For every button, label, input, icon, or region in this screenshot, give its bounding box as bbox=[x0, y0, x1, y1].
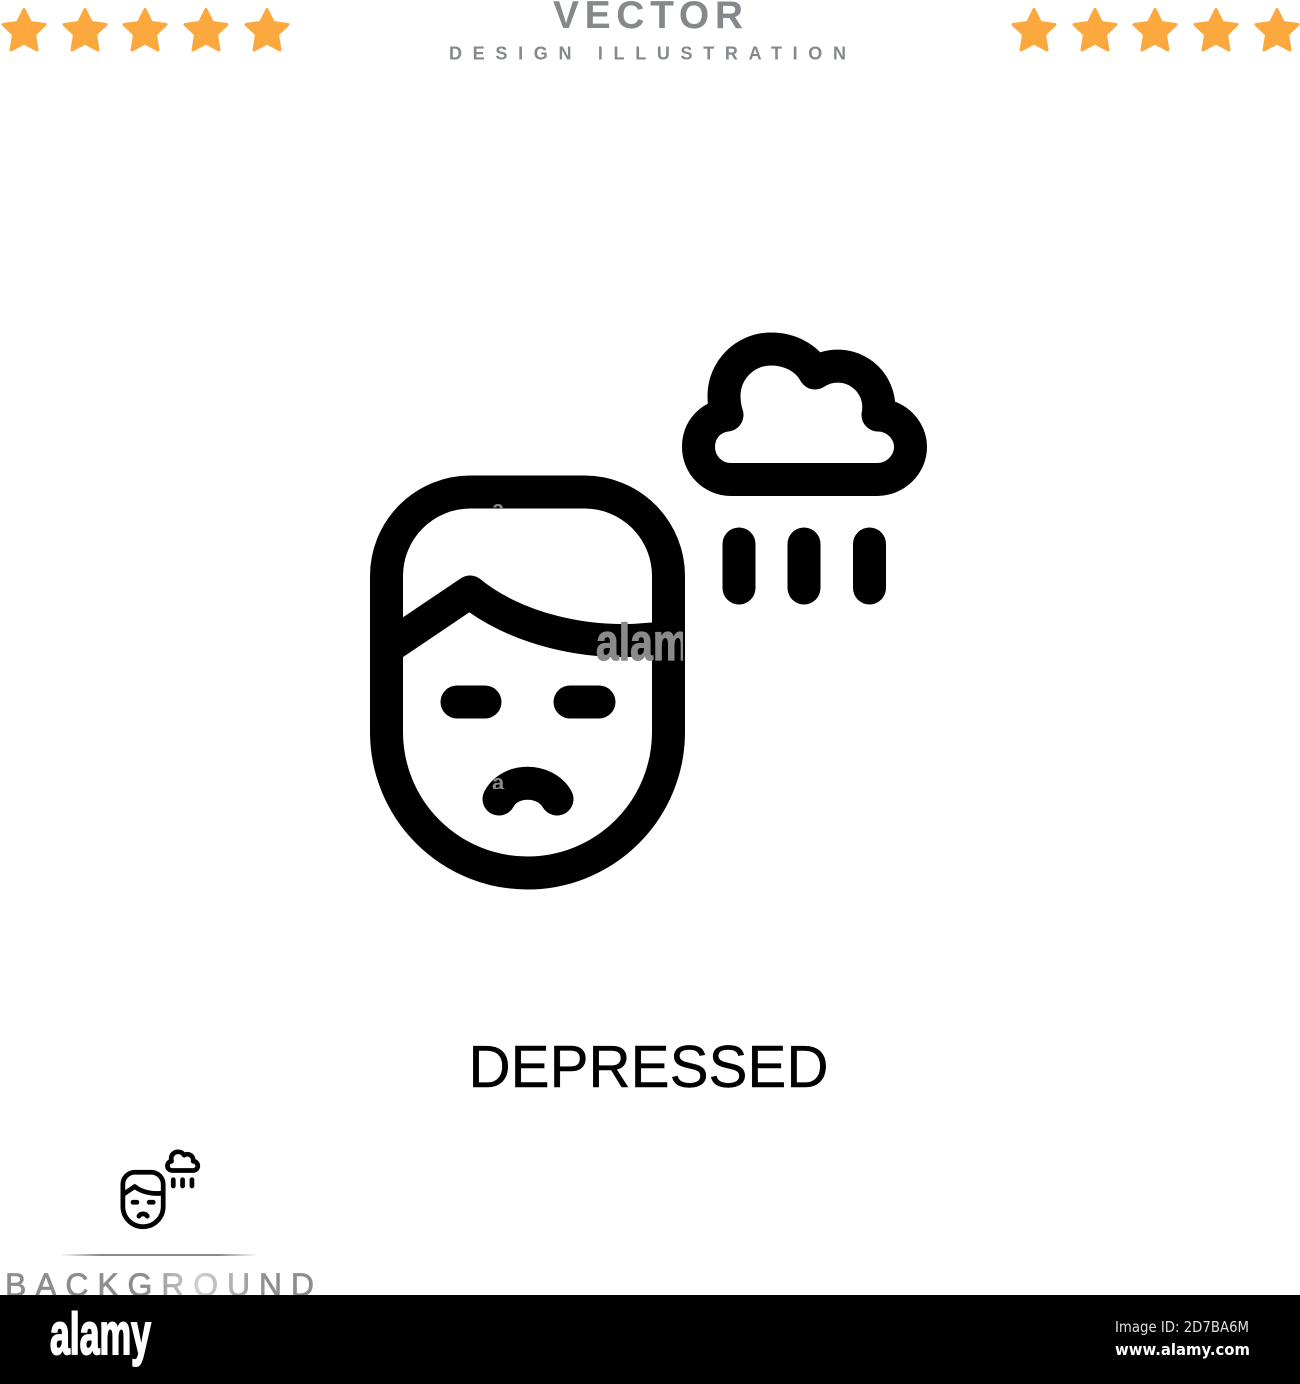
cloud bbox=[698, 349, 910, 480]
image ID: Image ID: 2D7BA6M bbox=[1115, 1318, 1249, 1336]
rain drops bbox=[739, 544, 870, 588]
divider rule bbox=[60, 1254, 258, 1256]
header: DESIGN ILLUSTRATION: DESIGN ILLUSTRATION bbox=[449, 44, 846, 64]
small icon: depressed face with rain cloud bbox=[123, 1152, 198, 1227]
right star rating bbox=[1013, 10, 1298, 50]
main icon: depressed face with rain cloud bbox=[386, 349, 910, 873]
footer bar bbox=[0, 1295, 1300, 1384]
watermark over hair: alamy bbox=[596, 614, 712, 672]
left star rating bbox=[3, 10, 288, 50]
eyes bbox=[457, 686, 599, 718]
face outline bbox=[386, 492, 668, 873]
watermark fragment at top of face: a bbox=[492, 496, 505, 521]
website: www.alamy.com bbox=[1115, 1340, 1250, 1359]
label: BACKGROUND: BACKGROUND bbox=[5, 1267, 314, 1303]
mouth bbox=[499, 783, 557, 799]
alamy logo: alamy bbox=[50, 1302, 151, 1367]
hair bbox=[390, 592, 668, 646]
label: DEPRESSED: DEPRESSED bbox=[468, 1034, 828, 1100]
watermark fragment on mouth: a bbox=[492, 770, 505, 795]
